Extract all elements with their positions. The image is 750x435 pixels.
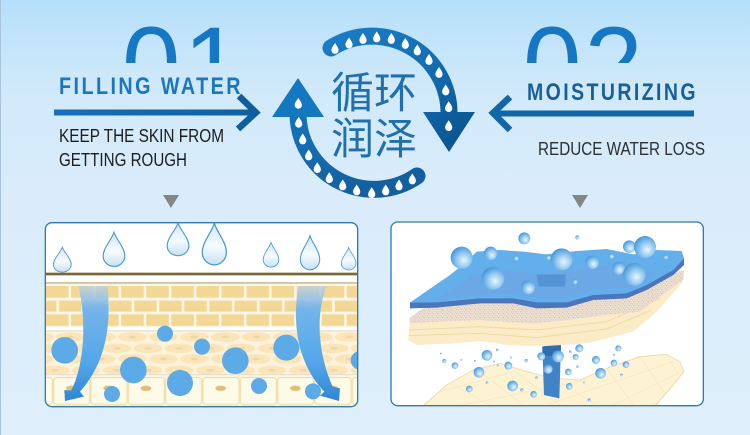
panel: skin barrier layers [391, 222, 703, 406]
inner darker patch [433, 262, 657, 302]
center heading: 润泽 [331, 116, 417, 164]
arrow pointing right [54, 96, 256, 129]
left flow arrow [64, 286, 109, 401]
upper arc arrow [331, 31, 475, 152]
heading: filling water: FILLING WATER [59, 73, 243, 100]
center heading: 循环 [331, 70, 417, 118]
blue top layer [410, 249, 684, 303]
lower skin sheet [423, 354, 684, 406]
oval cell layer [45, 330, 358, 375]
skin surface lines [45, 273, 358, 284]
panel: skin water absorption [45, 223, 369, 407]
blue top layer edge [410, 258, 684, 308]
number 02: 02 [523, 6, 646, 123]
connecting column [542, 343, 561, 398]
water bubbles [440, 232, 668, 402]
pointer triangle [572, 195, 588, 208]
right flow arrow [296, 286, 340, 401]
sand layer [409, 270, 684, 323]
water drops [53, 223, 356, 272]
description text: GETTING ROUGH [59, 150, 187, 170]
right section: moisturizing [493, 6, 705, 208]
arrow pointing left [493, 97, 694, 130]
number 01: 01 [122, 6, 245, 123]
brick layer [45, 284, 358, 327]
left section: filling water [54, 6, 256, 208]
yellow dermis layer [408, 278, 683, 346]
heading: moisturizing: MOISTURIZING [527, 79, 698, 106]
lower arc arrow [272, 78, 417, 198]
base cell layer [45, 376, 358, 407]
water molecules [51, 326, 369, 402]
description text: REDUCE WATER LOSS [538, 139, 705, 159]
description text: KEEP THE SKIN FROM [59, 126, 224, 146]
center cycle icon [272, 31, 475, 198]
pointer triangle [163, 195, 179, 208]
